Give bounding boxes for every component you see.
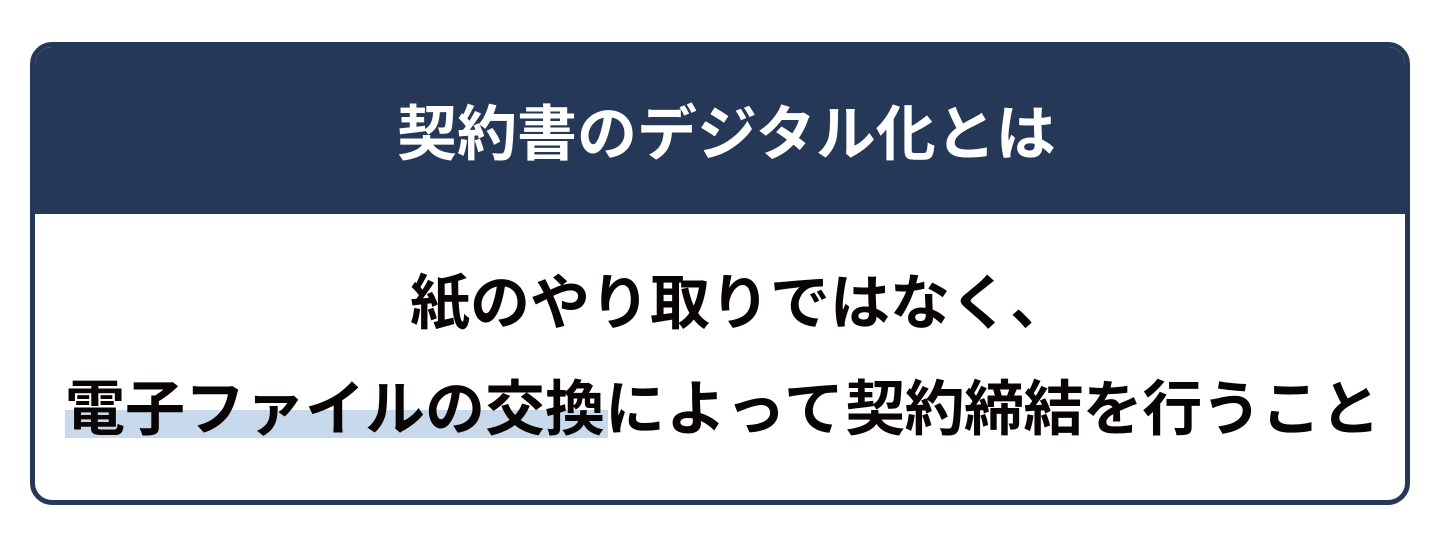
header band xyxy=(30,42,1410,214)
heading: 契約書のデジタル化とは xyxy=(397,101,1056,168)
text line 1: 紙のやり取りではなく、 xyxy=(410,270,1070,337)
text line 2: 電子ファイルの交換によって契約締結を行うこと xyxy=(65,376,1380,443)
highlight: 電子ファイルの交換 xyxy=(65,410,608,438)
